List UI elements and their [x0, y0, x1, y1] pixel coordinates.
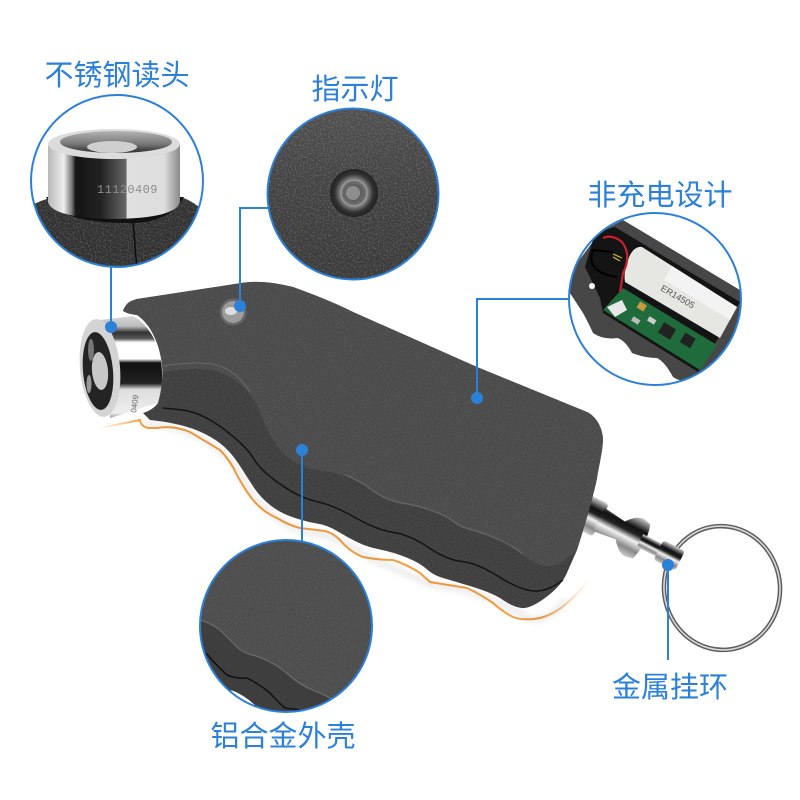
leader line and dot [471, 299, 569, 404]
circle outline [200, 540, 372, 712]
circle outline [268, 108, 438, 280]
device: gauge with grip, head and key ring [76, 282, 788, 657]
magnified photo circle [570, 220, 740, 380]
indicator lens on device [220, 298, 246, 326]
grip top face [123, 282, 603, 566]
wires [603, 237, 627, 292]
metal reading head [76, 316, 162, 419]
orange contour line under the device [100, 420, 590, 619]
battery: ER14505 [659, 283, 697, 310]
highlight along grip edge [163, 363, 523, 554]
connector [607, 300, 627, 317]
leader line and dot [105, 267, 117, 333]
magnified photo circle [35, 129, 198, 266]
metal reading head: 0409 [129, 394, 141, 413]
magnified photo circle: 11120409 [97, 183, 158, 197]
leader line and dot [234, 208, 268, 312]
circle outline [31, 95, 203, 267]
magnified photo circle [198, 538, 374, 714]
callout: aluminium alloy shell [198, 444, 374, 753]
circle outline [569, 213, 741, 385]
callout: metal key ring [612, 559, 728, 704]
magnified photo circle [267, 108, 439, 280]
leader line and dot [662, 559, 674, 660]
key ring [656, 519, 788, 657]
callout: stainless reading head [30, 59, 205, 333]
grip body outer shell [123, 282, 603, 608]
heading: 非充电设计 [587, 179, 733, 212]
leader line and dot [296, 444, 308, 541]
callout: indicator light [234, 73, 439, 312]
shell seam line [163, 408, 563, 591]
circuit board [603, 288, 717, 370]
heading: 铝合金外壳 [210, 720, 356, 753]
callout: non-rechargeable design [471, 179, 745, 404]
heading: 指示灯 [311, 73, 399, 106]
battery [625, 247, 737, 338]
soft shadow [143, 424, 566, 619]
metal swivel connector [570, 491, 690, 580]
heading: 金属挂环 [612, 671, 728, 704]
heading: 不锈钢读头 [44, 59, 190, 92]
